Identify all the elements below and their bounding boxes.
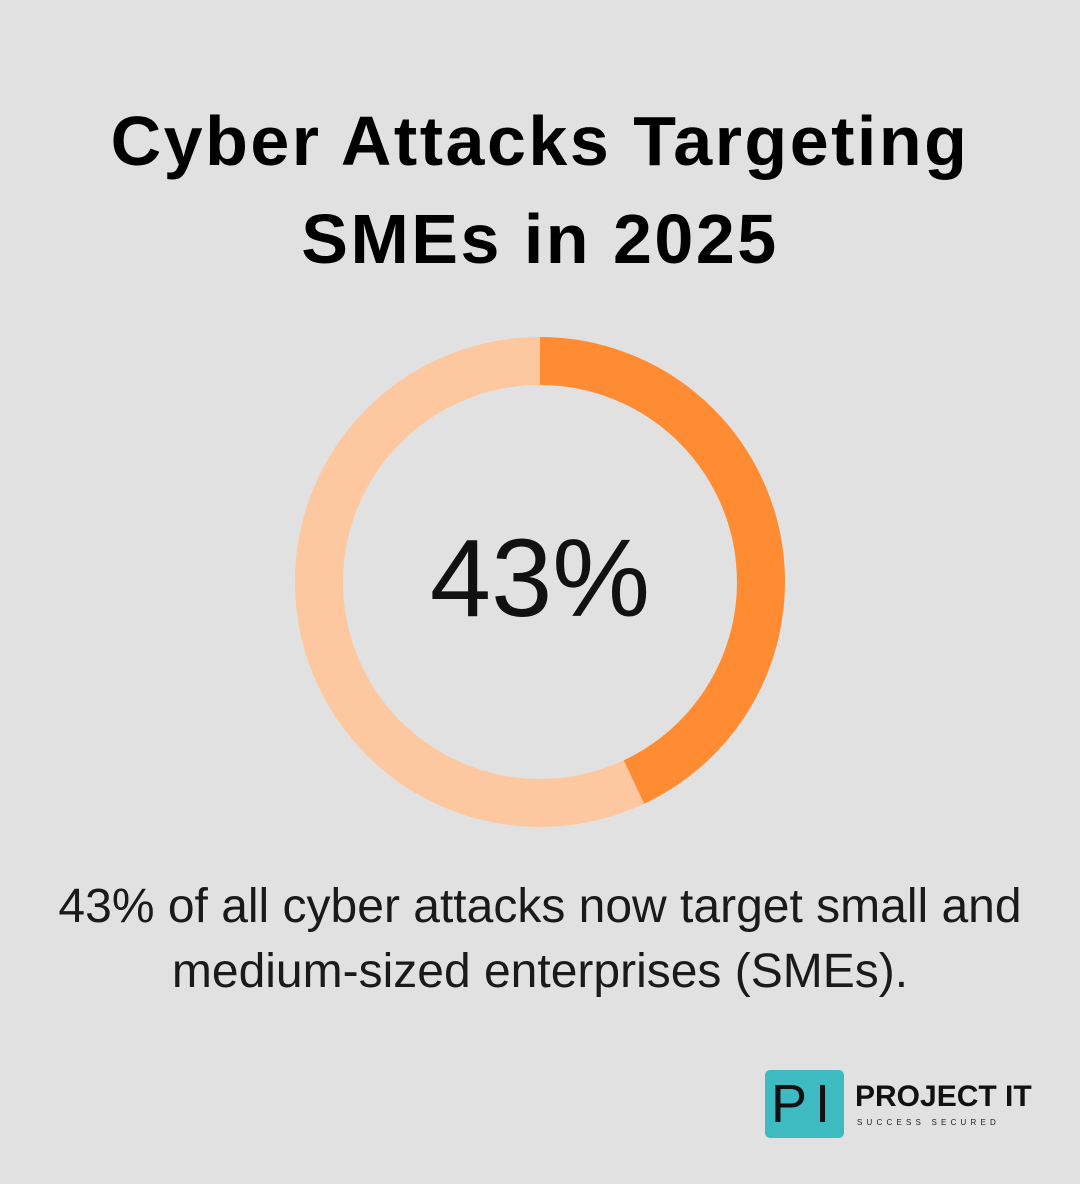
- logo tagline: SUCCESS SECURED: [857, 1118, 1000, 1127]
- donut chart: 43%: [430, 517, 650, 640]
- title: [111, 102, 969, 278]
- description text: [58, 880, 1022, 998]
- logo name: PROJECT IT: [855, 1080, 1032, 1113]
- logo icon: PI: [771, 1074, 838, 1134]
- description text: medium-sized enterprises (SMEs).: [172, 945, 908, 998]
- title: SMEs in 2025: [301, 200, 779, 278]
- description text: 43% of all cyber attacks now target small and: [58, 880, 1022, 933]
- logo: [765, 1070, 1032, 1138]
- title: Cyber Attacks Targeting: [111, 102, 969, 180]
